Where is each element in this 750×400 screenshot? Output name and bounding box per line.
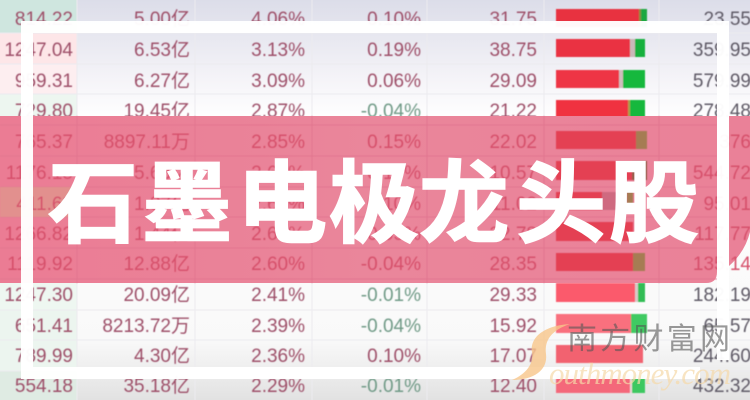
table figures above and below band: 31.75 — [489, 9, 537, 30]
table figures above and below band: 35.18亿 — [123, 375, 190, 397]
table rows inside band: 1119.92 — [7, 254, 73, 275]
watermark swoosh S — [512, 324, 570, 380]
table figures above and below band: 1247.30 — [4, 285, 73, 306]
table figures above and below band: 8213.72万 — [102, 316, 190, 337]
table figures above and below band: 579.99 — [693, 71, 750, 92]
title: 墨 — [142, 131, 232, 261]
table figures above and below band: 359.95 — [693, 40, 750, 61]
table rows inside band: 2.85% — [251, 132, 305, 153]
table figures above and below band: -0.01% — [361, 285, 421, 306]
table figures above and below band: 0.19% — [367, 40, 421, 61]
table figures above and below band: 0.10% — [367, 9, 421, 30]
table figures above and below band: 278.48 — [693, 101, 750, 122]
table rows inside band: 117.77 — [694, 224, 750, 245]
table figures above and below band: 2.39% — [251, 316, 305, 337]
table rows inside band: 0.15% — [367, 132, 421, 153]
table figures above and below band: 4.30亿 — [134, 345, 190, 367]
table rows inside band: 765.37 — [15, 132, 73, 153]
table figures above and below band: 959.31 — [15, 71, 73, 92]
table figures above and below band: 6.53亿 — [134, 39, 190, 61]
table figures above and below band: 5.00亿 — [134, 8, 190, 30]
table figures above and below band: 15.92 — [489, 316, 537, 337]
stacked ratio bars above and below band — [556, 9, 647, 393]
table figures above and below band: 21.22 — [489, 101, 537, 122]
table rows inside band: 95.01 — [703, 194, 750, 215]
table rows inside band: 1.87亿 — [134, 193, 190, 215]
table figures above and below band: 182.19 — [693, 285, 750, 306]
table rows inside band: 22.02 — [489, 132, 537, 153]
table rows inside band: 411.68 — [16, 194, 73, 215]
table figures above and below band: 29.09 — [489, 71, 537, 92]
table figures above and below band: 19.45亿 — [123, 100, 190, 122]
table rows inside band: 0.10% — [367, 194, 421, 215]
table rows inside band: 0.05% — [367, 224, 421, 245]
title: 电 — [237, 131, 327, 261]
table figures above and below band: 2.87% — [251, 101, 305, 122]
table rows inside band: 8897.11万 — [104, 132, 190, 153]
title: 石 — [48, 131, 138, 261]
table rows inside band: 135.14 — [693, 254, 750, 275]
table rows inside band: 10.57 — [489, 163, 537, 184]
table rows inside band: 2.69% — [251, 163, 305, 184]
table figures above and below band: 3.09% — [251, 71, 305, 92]
red title band — [0, 116, 750, 283]
table figures above and below band: 65.57 — [703, 316, 750, 337]
table rows inside band: 5.63亿 — [134, 162, 190, 184]
title: 股 — [609, 131, 699, 261]
table figures above and below band: 651.41 — [15, 316, 73, 337]
table figures above and below band: 554.18 — [15, 376, 73, 397]
title: 极 — [329, 131, 419, 261]
table figures above and below band: 4.06% — [251, 9, 305, 30]
table figures above and below band: -0.01% — [361, 376, 421, 397]
table rows inside band: 1176.15 — [6, 163, 73, 184]
table figures above and below band: 2.41% — [251, 285, 305, 306]
table rows inside band — [0, 116, 750, 283]
table figures above and below band: 729.80 — [15, 101, 73, 122]
table figures above and below band: 17.07 — [489, 346, 537, 367]
table figures above and below band: 29.33 — [489, 285, 537, 306]
table figures above and below band: 6.27亿 — [134, 70, 190, 92]
table figures above and below band: 789.99 — [15, 346, 73, 367]
table rows inside band: 2.61% — [251, 224, 305, 245]
watermark url: outhmoney.com — [549, 356, 731, 391]
table rows inside band: 1.44亿 — [134, 223, 190, 245]
table rows inside band: 12.88亿 — [123, 253, 190, 275]
table figures above and below band: 0.10% — [367, 346, 421, 367]
table rows inside band: 544.72 — [693, 163, 750, 184]
title: 头 — [516, 131, 606, 261]
table rows inside band: -0.04% — [361, 254, 421, 275]
table rows inside band: 32.78 — [489, 224, 537, 245]
watermark: southmoney — [512, 314, 731, 391]
table rows inside band: 28.35 — [489, 254, 537, 275]
table figures above and below band: 0.06% — [367, 71, 421, 92]
table figures above and below band: 3.13% — [251, 40, 305, 61]
table rows inside band: 2.66% — [251, 194, 305, 215]
table rows inside band: 2.60% — [251, 254, 305, 275]
title: 龙 — [419, 131, 509, 261]
table figures above and below band: -0.04% — [361, 101, 421, 122]
table figures above and below band: 2.29% — [251, 376, 305, 397]
table figures above and below band: 20.09亿 — [123, 284, 190, 306]
table rows inside band: 0.17% — [367, 163, 421, 184]
table figures above and below band: 814.22 — [15, 9, 73, 30]
table figures above and below band: 12.40 — [489, 376, 537, 397]
title — [48, 131, 699, 261]
table figures above and below band: -0.04% — [361, 316, 421, 337]
table rows inside band: 11.02 — [491, 194, 537, 215]
table figures above and below band: 1247.04 — [4, 40, 73, 61]
table figures above and below band: 38.75 — [489, 40, 537, 61]
table figures above and below band: 23.55 — [703, 9, 750, 30]
table rows inside band: 1266.82 — [4, 224, 73, 245]
table figures above and below band: 432.32 — [693, 376, 750, 397]
table figures above and below band: 2.36% — [251, 346, 305, 367]
table figures above and below band: 244.60 — [693, 346, 750, 367]
watermark chinese name: 南方财富网 — [567, 314, 730, 358]
